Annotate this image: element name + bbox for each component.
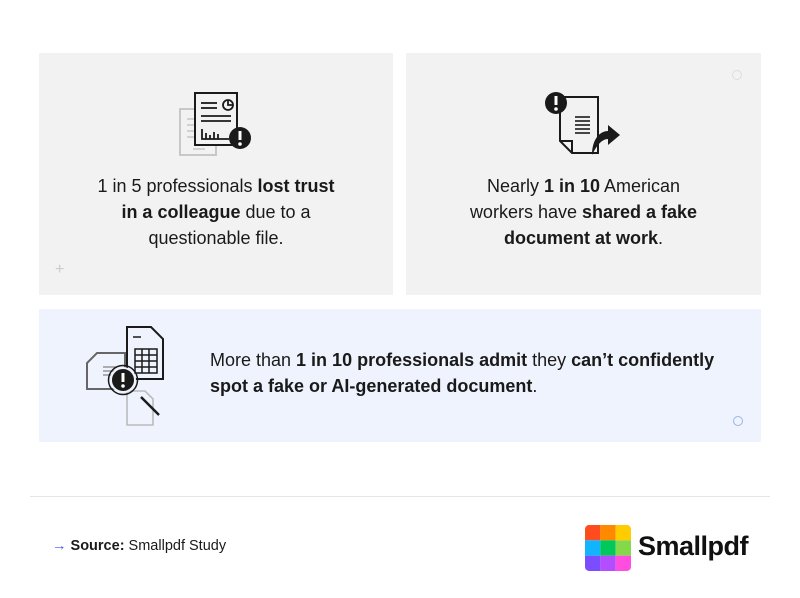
text: stat 3 — [210, 350, 714, 396]
logo: Smallpdf — [585, 525, 749, 571]
icon: documents with magnifier — [86, 326, 164, 426]
text: stat 1: 1 in 5 professionals lost trust — [97, 176, 335, 196]
panel: fake document shared — [406, 53, 761, 295]
text: stat 1: questionable file. — [148, 228, 284, 248]
source: → Source: Smallpdf Study — [52, 538, 226, 554]
text: stat 2: document at work. — [504, 228, 663, 248]
decoration plus: + — [55, 261, 64, 278]
text: stat 3: spot a fake or AI-generated document. — [210, 376, 537, 396]
icon: document share — [545, 92, 620, 155]
text: stat 3: More than 1 in 10 professionals admit they can’t confidently — [210, 350, 714, 370]
text: stat 2: workers have shared a fake — [470, 202, 697, 222]
text: stat 2: Nearly 1 in 10 American — [487, 176, 680, 196]
text: stat 2 — [470, 176, 697, 248]
text: stat 1 — [97, 176, 335, 248]
text: stat 1: in a colleague due to a — [121, 202, 311, 222]
panel: can't spot fakes — [39, 309, 761, 442]
icon: report with alert — [179, 92, 251, 156]
panel: lost trust — [39, 53, 393, 295]
logo: Smallpdf: Smallpdf — [638, 531, 748, 561]
